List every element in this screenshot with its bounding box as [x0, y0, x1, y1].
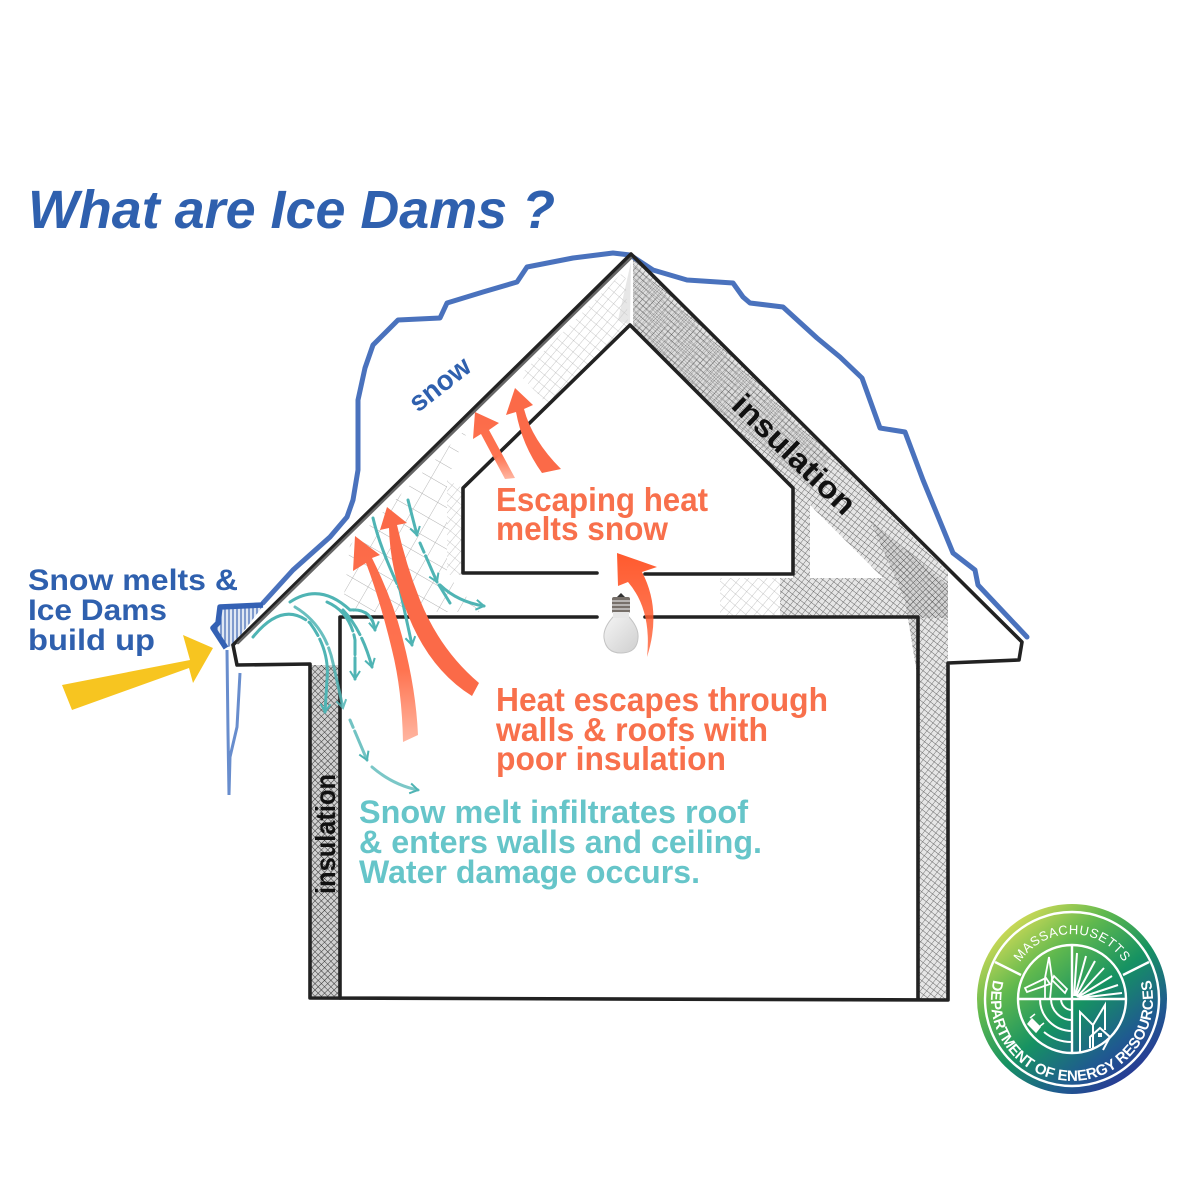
label: snow melts and ice dams: build up [28, 624, 155, 657]
label: heat escapes: poor insulation [496, 740, 726, 777]
insulation hatching [311, 258, 948, 1000]
teal water arrows [253, 500, 484, 790]
label: snow melt infiltrates: Water damage occurs. [359, 854, 700, 890]
label: heat escapes: walls & roofs with [495, 711, 768, 748]
logo: Massachusetts Department of Energy Resources: MASSACHUSETTS [1013, 925, 1130, 962]
logo: Massachusetts Department of Energy Resources: DEPARTMENT OF ENERGY RESOURCES [990, 980, 1154, 1081]
label: snow: snow [403, 350, 477, 418]
title: What are Ice Dams ? [28, 180, 555, 240]
label: heat escapes [495, 681, 828, 777]
label: snow melt infiltrates: & enters walls and ceiling. [359, 824, 762, 860]
icicle [227, 650, 240, 795]
ice dam [213, 605, 263, 648]
heat arrow: lower left [353, 536, 418, 742]
plug [1028, 1014, 1044, 1032]
label: insulation left: insulation [310, 774, 341, 894]
label: snow melt infiltrates: Snow melt infiltrates roof [359, 794, 748, 830]
label: escaping heat: Escaping heat [496, 481, 708, 518]
label: insulation right: insulation [725, 387, 863, 522]
yellow arrow [62, 635, 213, 710]
heat arrow: attic left [473, 412, 515, 479]
label: snow melt infiltrates [359, 794, 762, 890]
label: snow melts and ice dams: Ice Dams [28, 594, 167, 627]
heat arrow: light bulb [617, 553, 657, 657]
icon: light bulb [604, 593, 638, 653]
label: snow melts and ice dams [28, 564, 238, 657]
concentric arcs [1040, 999, 1072, 1042]
heat arrow: attic right [506, 388, 561, 473]
label: escaping heat: melts snow [496, 510, 668, 547]
label: snow melts and ice dams: Snow melts & [28, 564, 238, 597]
wind turbine [1025, 957, 1067, 999]
house outline [233, 254, 1022, 1000]
sun rays [1074, 953, 1122, 998]
snow outline [263, 253, 1027, 637]
logo: Massachusetts Department of Energy Resources [977, 904, 1167, 1094]
heat arrow: lower right [380, 507, 479, 696]
label: escaping heat [496, 481, 708, 547]
buildings [1080, 1005, 1105, 1052]
label: heat escapes: Heat escapes through [496, 681, 828, 718]
